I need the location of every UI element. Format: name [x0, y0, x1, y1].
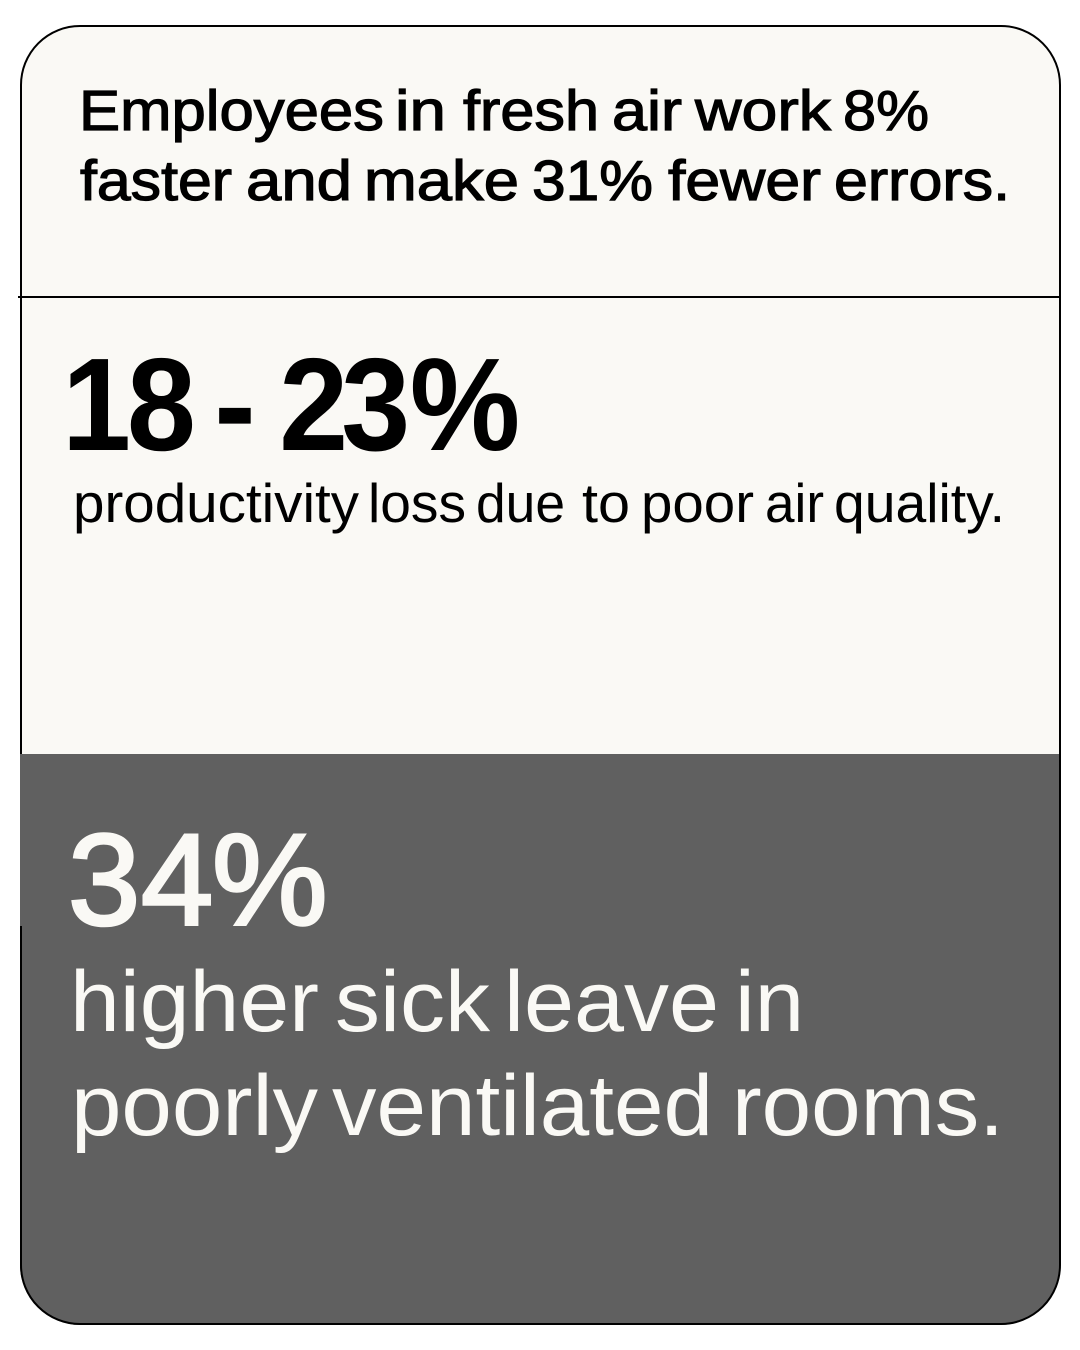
heading: fresh air benefit: 8%: [843, 79, 929, 143]
heading: fresh air benefit: [79, 79, 1010, 213]
heading: fresh air benefit: and: [246, 149, 352, 213]
statistic: productivity loss: quality.: [834, 472, 1005, 534]
statistic: sick leave: 34%: [68, 806, 328, 952]
statistic: sick leave: [68, 806, 1004, 1154]
statistic: productivity loss: loss: [368, 472, 466, 534]
statistic: sick leave: in: [735, 954, 804, 1050]
heading: fresh air benefit: make: [364, 149, 519, 213]
statistic: sick leave: leave: [504, 954, 719, 1050]
statistic: productivity loss: productivity: [73, 472, 360, 534]
heading: fresh air benefit: fresh: [463, 79, 599, 143]
statistic: sick leave: rooms.: [732, 1058, 1004, 1154]
statistic: productivity loss: 18 - 23%: [62, 331, 520, 479]
statistic: productivity loss: to: [582, 472, 630, 534]
heading: fresh air benefit: 31%: [532, 149, 653, 213]
heading: fresh air benefit: in: [395, 79, 446, 143]
heading: fresh air benefit: air: [612, 79, 682, 143]
heading: fresh air benefit: fewer: [668, 149, 821, 213]
statistic: sick leave: ventilated: [332, 1058, 713, 1154]
heading: fresh air benefit: errors.: [834, 149, 1010, 213]
statistic: productivity loss: due: [476, 472, 565, 534]
statistic: sick leave: higher: [70, 954, 319, 1050]
panel: dark statistic section: [20, 754, 1060, 1325]
statistic: sick leave: sick: [335, 954, 491, 1050]
statistic: sick leave: poorly: [71, 1058, 318, 1154]
heading: fresh air benefit: work: [694, 79, 832, 143]
heading: fresh air benefit: faster: [80, 149, 232, 213]
heading: fresh air benefit: Employees: [79, 79, 384, 143]
statistic: productivity loss: poor: [641, 472, 754, 534]
statistic: productivity loss: [62, 331, 1005, 534]
statistic: productivity loss: air: [765, 472, 824, 534]
